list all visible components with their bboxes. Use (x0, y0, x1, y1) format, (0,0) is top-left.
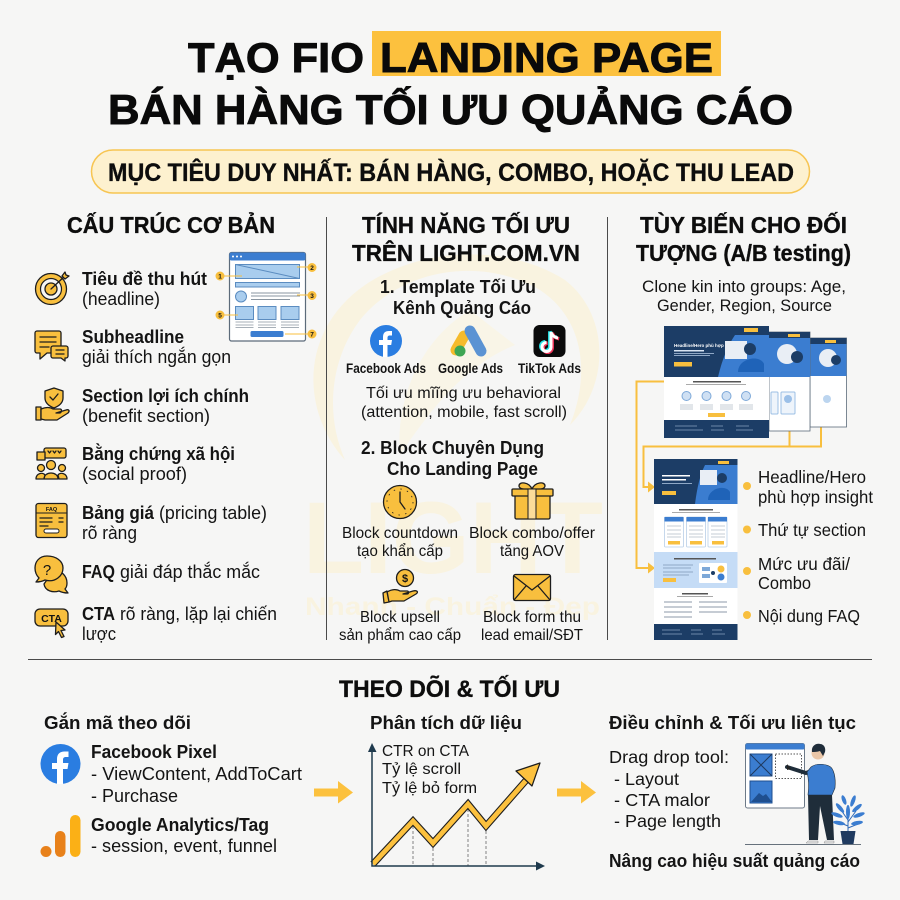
item: social proof: Bằng chứng xã hội (82, 443, 235, 464)
panel: features on light.com.vn (339, 211, 596, 644)
subheading: template: Kênh Quảng Cáo (393, 297, 531, 318)
drag drop list: - Page length (614, 811, 721, 831)
item: headline (82, 269, 207, 309)
title: BÁN HÀNG TỐI ƯU QUẢNG CÁO (108, 85, 793, 133)
subheading: blocks: 2. Block Chuyên Dụng (361, 437, 544, 458)
item: benefit section: (benefit section) (82, 406, 210, 426)
text: behavioral: (attention, mobile, fast scroll) (361, 404, 567, 421)
item: subheadline: giải thích ngắn gọn (82, 346, 231, 367)
item: CTA: lược (82, 624, 116, 644)
icon: Google Ads (454, 331, 481, 356)
panel: tracking codes (40, 712, 302, 857)
panel: data analysis (368, 712, 545, 870)
metrics list: Tỷ lệ bỏ form (382, 780, 477, 797)
panel: audience customization (636, 211, 873, 640)
item: CTA: CTA (82, 604, 115, 624)
text: groups: Clone kin into groups: Age, (642, 277, 846, 296)
wireframe diagram: 2 (310, 265, 314, 272)
page mockup: front variant (664, 326, 769, 438)
text: Facebook Pixel (91, 742, 302, 806)
icon: gift (512, 483, 553, 519)
icon: Facebook (370, 325, 402, 357)
drag drop list: - Layout (614, 769, 679, 789)
icon: clock (384, 486, 416, 518)
item: headline: (headline) (82, 289, 160, 309)
wireframe diagram: 7 (310, 332, 314, 338)
customization list: Mức ưu đãi/ (758, 554, 850, 574)
item: social proof: (social proof) (82, 464, 187, 484)
page mockup: middle variant (769, 332, 810, 431)
block labels: upsell and form: sản phẩm cao cấp (339, 626, 461, 644)
item: pricing table (82, 503, 267, 543)
block labels: upsell and form (339, 609, 583, 644)
text: groups (642, 277, 846, 315)
ad channel labels (346, 360, 581, 376)
watermark: LIGHT logo: LIGHT (303, 481, 603, 595)
item: benefit section (82, 386, 249, 426)
heading: features: TÍNH NĂNG TỐI ƯU (362, 211, 570, 238)
wireframe diagram: 5 (218, 312, 222, 320)
metrics list (382, 743, 477, 797)
customization list: Nội dung FAQ (758, 606, 860, 626)
block labels: countdown and combo: Block countdown (342, 525, 458, 542)
connector lines (636, 382, 821, 574)
heading: features (352, 211, 580, 266)
arrow: analysis to optimization (557, 781, 596, 804)
icon: pricing table: FAQ (46, 507, 58, 513)
item: benefit section: Section lợi ích chính (82, 386, 249, 406)
item: subheadline (82, 327, 231, 367)
subheading: template: 1. Template Tối Ưu (380, 276, 536, 297)
icon: FAQ bubbles (35, 556, 68, 593)
item: headline: Tiêu đề thu hút (82, 269, 207, 289)
title: LANDING PAGE (380, 34, 713, 81)
block labels: upsell and form: lead email/SĐT (481, 627, 583, 644)
block labels: upsell and form: Block upsell (360, 609, 440, 626)
subheading: template (380, 276, 536, 318)
text: Google Analytics: - session, event, funnel (91, 836, 277, 856)
wireframe diagram: 3 (310, 293, 314, 300)
text: Google Analytics: Google Analytics/Tag (91, 815, 269, 835)
icon: social proof (36, 448, 67, 479)
icon: envelope (514, 574, 550, 600)
block labels: countdown and combo: tăng AOV (500, 543, 564, 560)
icon: Google Analytics (40, 815, 80, 857)
heading: basic structure: CẤU TRÚC CƠ BẢN (67, 210, 275, 238)
block labels: countdown and combo: Block combo/offer (469, 525, 596, 542)
customization list: Thứ tự section (758, 520, 866, 540)
icon: Facebook Pixel (40, 744, 80, 784)
goal pill (92, 150, 810, 193)
metrics list: Tỷ lệ scroll (382, 761, 461, 778)
subheading: blocks (361, 437, 544, 479)
heading: data analysis: Phân tích dữ liệu (370, 712, 522, 733)
text: Facebook Pixel: Facebook Pixel (91, 742, 217, 762)
page mockup: final landing page (654, 459, 738, 640)
item: FAQ: giải đáp thắc mắc (120, 561, 260, 582)
item: CTA: rõ ràng, lặp lại chiến (120, 604, 277, 624)
customization list: Headline/Hero (758, 467, 866, 487)
item: subheadline: Subheadline (82, 327, 184, 347)
customization list: Combo (758, 573, 811, 593)
item: FAQ: FAQ (82, 562, 115, 582)
panel: continuous optimization (609, 712, 865, 871)
item: CTA (82, 604, 277, 644)
ad channel labels: TikTok Ads (518, 360, 581, 376)
heading: A/B testing: TƯỢNG (A/B testing) (636, 240, 851, 266)
column dividers (28, 217, 872, 660)
text: behavioral (361, 385, 567, 421)
text: Google Analytics (91, 815, 277, 856)
text: Facebook Pixel: - ViewContent, AddToCart (91, 764, 302, 784)
heading: A/B testing: TÙY BIẾN CHO ĐỐI (640, 211, 847, 238)
drag drop list (609, 747, 729, 831)
item: social proof (82, 443, 235, 484)
heading: A/B testing (636, 211, 851, 266)
ad channel labels: Facebook Ads (346, 360, 426, 376)
title (108, 31, 793, 133)
icon: FAQ bubbles: ? (43, 562, 51, 579)
text: ad performance: Nâng cao hiệu suất quảng cáo (609, 851, 860, 871)
customization list: phù hợp insight (758, 487, 873, 507)
icon: chat bubbles (35, 331, 68, 361)
title: TẠO FIO (188, 34, 364, 81)
item: pricing table: Bảng giá (82, 503, 155, 523)
section heading: tracking and optimization: THEO DÕI & TỐI ƯU (339, 675, 560, 703)
ad channel labels: Google Ads (438, 360, 503, 376)
watermark: LIGHT logo: Nhanh - Chuẩn - Đẹp (305, 593, 600, 621)
block labels: countdown and combo: tạo khẩn cấp (357, 542, 443, 560)
line chart (368, 743, 545, 870)
arrow: tracking to analysis (314, 781, 353, 804)
block labels: upsell and form: Block form thu (483, 609, 581, 626)
customization list (743, 467, 873, 626)
drag drop list: Drag drop tool: (609, 747, 729, 767)
heading: continuous optimization: Điều chỉnh & Tối ưu liên tục (609, 712, 856, 733)
icon: TikTok (534, 325, 566, 357)
panel: basic structure (35, 210, 316, 644)
heading: features: TRÊN LIGHT.COM.VN (352, 239, 580, 266)
item: pricing table: rõ ràng (82, 523, 137, 543)
goal pill: MỤC TIÊU DUY NHẤT: BÁN HÀNG, COMBO, HOẶC THU LEAD (108, 157, 794, 187)
item: pricing table: (pricing table) (159, 503, 267, 523)
subheading: blocks: Cho Landing Page (387, 458, 538, 479)
block labels: countdown and combo (342, 525, 596, 560)
wireframe diagram (216, 252, 316, 341)
text: behavioral: Tối ưu mĩĩng ưu behavioral (366, 385, 561, 402)
icon: CTA button (35, 609, 68, 638)
page mockup: front variant: Headline/Hero phù hợp (674, 343, 724, 348)
icon: target (36, 272, 69, 304)
heading: tracking codes: Gắn mã theo dõi (44, 712, 191, 733)
icon: hand with coin (383, 570, 417, 603)
text: Facebook Pixel: - Purchase (91, 786, 178, 806)
icon: hand with coin: $ (402, 573, 408, 585)
text: groups: Gender, Region, Source (657, 296, 832, 315)
drag drop list: - CTA malor (614, 790, 710, 810)
icon: pricing table (36, 504, 67, 538)
metrics list: CTR on CTA (382, 743, 469, 760)
watermark: LIGHT logo (303, 254, 603, 621)
icon: hand with shield (36, 388, 69, 420)
icon: CTA button: CTA (41, 613, 62, 625)
illustration: person editing page (745, 744, 865, 844)
page mockup: back variant (810, 338, 846, 427)
wireframe diagram: 1 (218, 274, 222, 280)
